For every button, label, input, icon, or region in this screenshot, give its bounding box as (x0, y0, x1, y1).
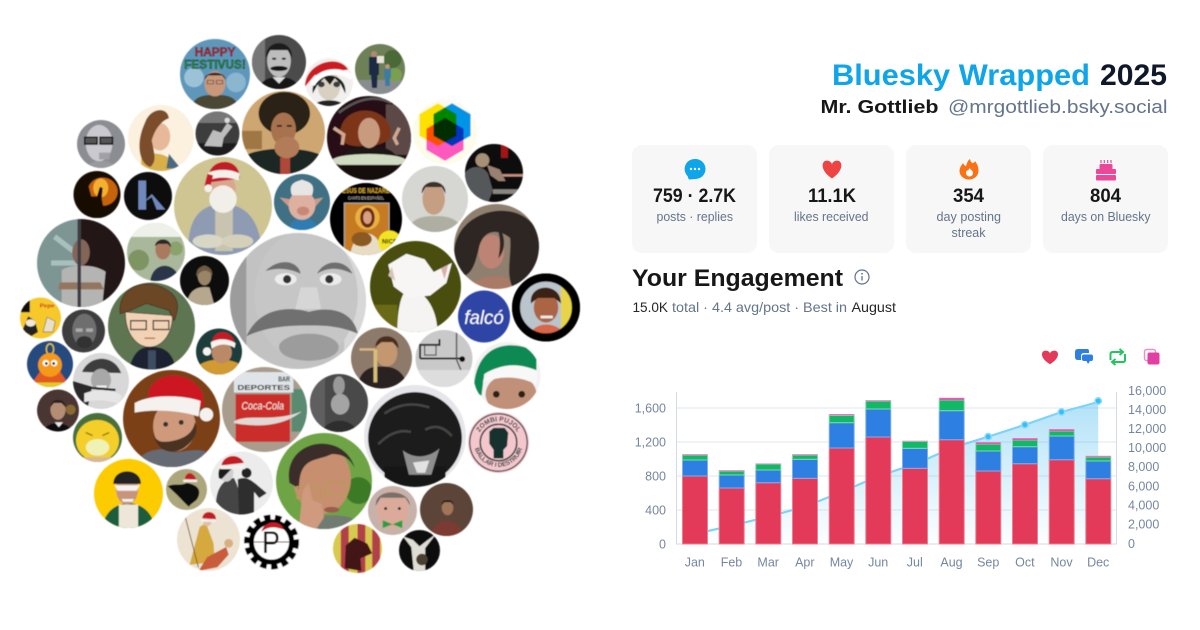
avatar: man in tuxedo (37, 390, 79, 432)
panel: day posting streak: streak (952, 225, 986, 240)
icon: flame (960, 159, 978, 180)
avatar: Jesus album cover: CANTS EN ESPAÑOL (348, 196, 385, 201)
avatar: Coca-Cola bar sign (222, 367, 307, 452)
panel: likes received: likes received (794, 209, 868, 224)
avatar: fire silhouette (74, 171, 120, 218)
icon: reposts arrows (1110, 349, 1125, 365)
month labels: Nov (1050, 556, 1073, 570)
right axis labels: 14,000 (1128, 403, 1166, 417)
avatar: large grey mustached man (230, 230, 366, 369)
avatar: Coca-Cola bar sign: DEPORTES (237, 383, 290, 392)
avatar: Jesus album cover (330, 183, 402, 256)
header: user name and handle: Mr. Gottlieb (820, 97, 939, 117)
icon: replies bubbles (1075, 349, 1093, 364)
avatar: pig chef (274, 174, 330, 230)
month labels: Aug (940, 556, 963, 570)
panel: days on Bluesky (1043, 145, 1168, 253)
month labels: Dec (1087, 556, 1109, 570)
avatar: Happy Festivus: FESTIVUS! (184, 57, 246, 71)
avatar: yellow comic cover (20, 298, 61, 338)
panel: day posting streak (906, 145, 1031, 253)
engagement summary text: August (852, 299, 896, 315)
avatar: mustached portrait (252, 35, 306, 89)
engagement summary text: 15.0K (632, 299, 669, 315)
left axis labels (635, 402, 666, 552)
chart: monthly engagement stacked bars with cumulative line (635, 384, 1166, 570)
left axis labels: 1,200 (635, 436, 666, 450)
icon: chat bubble (685, 159, 706, 180)
avatar: grey bearded figure (310, 374, 368, 432)
avatar: man in hat b/w (73, 353, 129, 409)
avatar: curly-haired man b/w (364, 385, 466, 487)
panel: days on Bluesky: days on Bluesky (1061, 209, 1151, 224)
panel: likes received (769, 145, 894, 253)
icon: likes heart (1042, 351, 1058, 364)
avatar: P gear logo: P (262, 525, 280, 560)
avatar: man in park (127, 223, 185, 281)
heading: Your Engagement: Your Engagement (632, 265, 843, 292)
avatar: green santa hat man (474, 342, 540, 414)
panel: day posting streak: day posting (936, 209, 1001, 224)
header: user name and handle: @mrgottlieb.bsky.social (948, 97, 1168, 117)
avatar: white kitten (370, 241, 461, 332)
avatar: man eating noodles (351, 328, 412, 388)
icon: heart (823, 161, 841, 178)
avatar: Happy Festivus: HAPPY (195, 45, 235, 59)
cumulative line (695, 398, 1101, 534)
avatar: white hands on black (399, 530, 440, 571)
header: title: Bluesky Wrapped (832, 59, 1090, 92)
avatar: young man on grey (402, 166, 468, 232)
right axis labels: 8,000 (1128, 460, 1159, 474)
avatar bubble cluster (19, 34, 581, 574)
avatar: Zombi Pujol badge: ZOMBI PUJOL (476, 416, 520, 433)
avatar: dark selfie (37, 219, 125, 307)
panel: days on Bluesky: 804 (1090, 186, 1121, 207)
avatar: santa hat man in yellow (196, 328, 242, 374)
avatar: framed lines b/w (416, 330, 472, 387)
left axis labels: 400 (645, 504, 666, 518)
right axis labels: 6,000 (1128, 480, 1159, 494)
panel: posts and replies: posts · replies (656, 209, 733, 224)
avatar: medieval illustration (177, 508, 240, 571)
month labels (685, 556, 1109, 570)
month labels: Feb (721, 556, 742, 570)
right axis labels: 4,000 (1128, 498, 1159, 512)
avatar: cartoon man with glasses (108, 282, 195, 370)
month labels: Jul (907, 556, 923, 570)
panel: day posting streak: 354 (953, 186, 984, 207)
avatar: man rubbing eye (276, 433, 372, 529)
avatar: comic man in black ring (512, 274, 580, 342)
panel: likes received: 11.1K (808, 186, 856, 207)
left axis labels: 1,600 (635, 402, 666, 416)
icon: birthday cake (1096, 160, 1116, 180)
avatar: bearded man with santa hat (123, 370, 220, 467)
avatar: dark bearded man b/w (62, 310, 105, 352)
avatar: blue b logo on black (124, 172, 172, 220)
avatar: anime with santa hat (305, 58, 353, 106)
avatar: man in dark brown room (420, 483, 473, 536)
right axis labels: 2,000 (1128, 518, 1159, 532)
avatar: Psyduck (73, 413, 122, 462)
avatar: Jimi portrait (242, 91, 325, 174)
avatar: smiling woman (128, 105, 194, 171)
left axis labels: 0 (659, 538, 666, 552)
panel: posts and replies (632, 145, 757, 253)
avatar: falcó logo (458, 290, 510, 342)
avatar: woman with curly hair (454, 204, 539, 289)
month labels: Jan (685, 556, 705, 570)
avatar: Jesus album cover: NICE (382, 238, 398, 245)
right axis labels: 10,000 (1128, 441, 1166, 455)
avatar: P gear logo (244, 514, 300, 570)
avatar: pianist (465, 144, 523, 202)
avatar: Jesus album cover: JESUS DE NAZARET (339, 186, 393, 195)
right axis labels: 0 (1128, 537, 1135, 551)
month labels: Mar (757, 556, 779, 570)
stacked bars (682, 398, 1111, 544)
month labels: Sep (977, 556, 999, 570)
header: title: 2025 (1100, 59, 1167, 92)
avatar: man in cap on yellow (94, 459, 163, 528)
icon: info (855, 270, 869, 284)
avatar: embracing couple b/w (210, 452, 273, 514)
avatar: violinist sepia (180, 256, 229, 305)
avatar: yellow comic cover: Pepe (40, 303, 54, 309)
avatar: Happy Festivus (180, 39, 250, 109)
right axis labels: 16,000 (1128, 384, 1166, 398)
right axis labels (1128, 384, 1166, 551)
right axis labels: 12,000 (1128, 422, 1166, 436)
month labels: Oct (1015, 556, 1035, 570)
engagement summary text: total · 4.4 avg/post · Best in (672, 299, 847, 315)
avatar: overlapping hexagons logo (413, 100, 477, 164)
avatar: Coca-Cola bar sign: BAR (278, 374, 290, 383)
avatar: falcó logo: falcó (464, 307, 504, 329)
avatar: witch with cauldron (327, 96, 411, 180)
avatar: Zombi Pujol badge: BALLAR I DESTRUIR (474, 447, 523, 468)
avatar: santa hat general (174, 157, 272, 255)
cumulative area (695, 402, 1098, 544)
avatar: guitarist smash (196, 112, 240, 156)
engagement summary text (632, 299, 896, 315)
chart legend (1042, 349, 1160, 365)
header: user name and handle (820, 97, 1168, 117)
avatar: Coca-Cola bar sign: Coca-Cola (242, 401, 284, 412)
month labels: May (830, 556, 854, 570)
avatar: orange creature (27, 341, 73, 387)
avatar: Zombi Pujol badge (468, 412, 530, 474)
avatar: striped flag figure (333, 524, 382, 573)
icon: quotes copy (1144, 350, 1160, 364)
month labels: Apr (795, 556, 815, 570)
month labels: Jun (868, 556, 888, 570)
avatar: man with green bow (368, 486, 417, 535)
avatar: black blob with santa hat (166, 469, 207, 510)
left axis labels: 800 (645, 470, 666, 484)
avatar: family in garden (355, 44, 405, 94)
panel: posts and replies: 759 · 2.7K (653, 186, 736, 207)
avatar: bald man with glasses (77, 120, 125, 168)
